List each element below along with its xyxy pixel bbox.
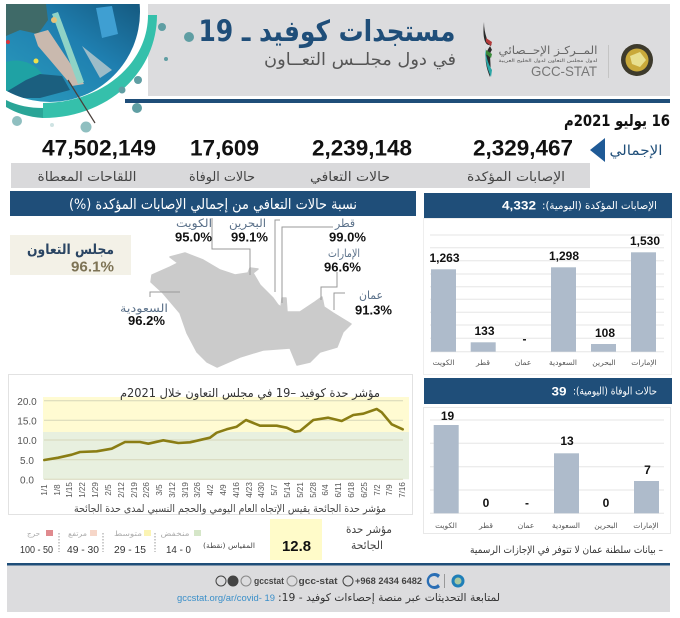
callout: GCC recovery (10, 235, 131, 276)
severity line (44, 409, 403, 460)
arrow (590, 138, 605, 162)
x axis labels: 6/18 (347, 482, 356, 498)
x axis labels: 7/9 (385, 484, 394, 496)
severity label: مؤشر حدة (346, 522, 392, 537)
daily deaths heading (424, 378, 672, 404)
y axis: 15.0 (17, 416, 37, 428)
x axis labels: 4/23 (245, 482, 254, 498)
map labels: البحرين (229, 216, 266, 231)
daily deaths heading: 39 (552, 384, 567, 398)
bar labels: الإمارات (631, 358, 657, 367)
x axis labels: 6/4 (321, 484, 330, 496)
legend: severity scale: 100 - 50 (20, 544, 53, 556)
x axis labels: 4/2 (206, 484, 215, 496)
logo: GCC-STAT: المــركـز الإحــصائي (498, 44, 598, 57)
bar labels: قطر (475, 358, 490, 367)
x axis labels: 2/26 (142, 482, 151, 498)
y axis: 5.0 (20, 456, 34, 467)
totals numbers: 2,329,467 (473, 136, 573, 160)
bar labels: البحرين (592, 358, 616, 367)
map labels: السعودية (120, 302, 168, 315)
map labels: الإمارات (328, 246, 360, 261)
x axis labels: 1/1 (40, 484, 49, 496)
bar values: 1,298 (549, 249, 579, 263)
bar values: 0 (603, 496, 610, 510)
daily deaths heading: حالات الوفاة (اليومية): (573, 386, 657, 398)
bar values: 1,263 (429, 251, 460, 265)
x axis labels: 1/8 (53, 484, 62, 496)
x axis labels: 1/15 (65, 482, 74, 498)
x axis labels: 5/14 (283, 482, 292, 498)
icon: swoosh logo (427, 573, 440, 589)
footnote: – بيانات سلطنة عمان لا تتوفر في الإجازات الرسمية (470, 545, 663, 556)
logo: GCC-STAT: لدول مجلس التعاون لدول الخليج العربية (498, 59, 598, 64)
bar values: 13 (560, 434, 574, 448)
legend: severity scale: 49 - 30 (67, 544, 99, 556)
logo: GCC-STAT (483, 22, 609, 79)
totals numbers (42, 136, 573, 160)
icon: GCC emblem (621, 44, 653, 76)
map labels: 99.1% (231, 230, 268, 244)
bar labels: قطر (478, 521, 493, 530)
bar labels: السعودية (552, 521, 580, 530)
x axis labels: 5/7 (270, 484, 279, 496)
map labels (120, 216, 392, 328)
map labels: 91.3% (355, 302, 392, 318)
title: مستجدات كوفيد ـ 19 (198, 14, 455, 48)
date: 16 يوليو 2021م (564, 111, 670, 130)
totals labels strip: حالات الوفاة (189, 170, 255, 185)
daily cases heading: الإصابات المؤكدة (اليومية): (542, 200, 657, 212)
legend: severity scale: 14 - 0 (166, 544, 191, 556)
map labels: عمان (359, 288, 383, 302)
totals labels strip: اللقاحات المعطاة (38, 170, 136, 185)
y axis: 20.0 (17, 397, 37, 408)
daily cases heading: 4,332 (502, 198, 536, 212)
footer contacts: +968 2434 6482 (355, 576, 422, 587)
bar values: 7 (644, 463, 651, 477)
x axis labels: 5/21 (296, 482, 305, 498)
x axis labels: 1/22 (78, 482, 87, 498)
bar labels (433, 358, 657, 367)
map of GCC (151, 253, 351, 367)
totals labels strip: حالات التعافي (310, 170, 390, 185)
bar labels: الإمارات (633, 521, 659, 530)
icon: round logo (452, 574, 464, 588)
legend: severity scale: متوسط (114, 530, 142, 538)
x axis labels: 3/26 (193, 482, 202, 498)
x axis labels: 2/12 (117, 482, 126, 498)
y axis (17, 397, 37, 486)
map labels: 95.0% (175, 230, 212, 244)
severity label: الجائحة (351, 538, 383, 552)
panel: daily deaths (424, 378, 672, 534)
header banner (125, 4, 670, 103)
severity label (346, 522, 392, 552)
x axis labels: 4/30 (257, 482, 266, 498)
y axis: 0.0 (20, 476, 34, 486)
x axis labels (40, 482, 407, 498)
panel: daily confirmed cases (424, 193, 672, 374)
legend: severity scale (20, 530, 255, 556)
panel: severity index chart (8, 374, 412, 515)
decorative droplets (12, 23, 194, 132)
totals numbers: 2,239,148 (312, 136, 412, 160)
subtitle: في دول مجلــس التعــاون (264, 50, 456, 70)
footer band (7, 563, 670, 612)
map leader lines (150, 218, 345, 310)
x axis labels: 2/19 (130, 482, 139, 498)
icon: needle (68, 80, 95, 123)
x axis labels: 3/19 (181, 482, 190, 498)
x axis labels: 7/16 (398, 482, 407, 498)
x axis labels: 2/5 (104, 484, 113, 496)
footer contacts (216, 573, 464, 589)
bar values: 133 (474, 324, 495, 338)
bars (434, 425, 659, 513)
x axis labels: 5/28 (309, 482, 318, 498)
totals labels strip (11, 163, 590, 188)
panel: recovery rate heading (10, 191, 416, 216)
totals labels strip: الإصابات المؤكدة (467, 170, 565, 185)
map labels: 96.2% (128, 313, 165, 328)
footer link line: gccstat.org/ar/covid- 19 (177, 593, 275, 603)
y axis: 10.0 (17, 436, 37, 447)
footer contacts: gccstat (254, 576, 284, 586)
footer link line: لمتابعة التحديثات عبر منصة إحصاءات كوفيد - 19: (278, 592, 500, 604)
panel: recovery rate heading: نسبة حالات التعافي من إجمالي الإصابات المؤكدة (%) (69, 197, 357, 213)
daily cases heading (424, 193, 672, 218)
bar values: 1,530 (630, 234, 660, 248)
bar values (441, 409, 651, 510)
legend: severity scale: 29 - 15 (114, 544, 146, 556)
callout: GCC recovery: مجلس التعاون (27, 242, 114, 258)
bar values: 108 (595, 326, 615, 340)
header image: medical collage (6, 4, 157, 118)
severity value box: 12.8 (282, 538, 311, 555)
map labels: 99.0% (329, 230, 366, 244)
map labels: 96.6% (324, 260, 361, 274)
totals numbers: 17,609 (190, 136, 259, 160)
map labels: قطر (334, 216, 355, 231)
icon: social media (216, 576, 353, 586)
legend: severity scale: مرتفع (68, 530, 87, 538)
chart title: مؤشر حدة كوفيد –19 في مجلس التعاون خلال 2021م (120, 386, 380, 401)
callout: GCC recovery: 96.1% (71, 258, 114, 276)
bar labels: الكويت (433, 358, 454, 367)
bar values: 0 (483, 496, 490, 510)
x axis labels: 4/16 (232, 482, 241, 498)
chart note: مؤشر حدة الجائحة يقيس الإتجاه العام اليومي والحجم النسبي لمدى حدة الجائحة (74, 503, 386, 515)
bar values: - (522, 332, 526, 346)
totals numbers: 47,502,149 (42, 136, 156, 160)
x axis labels: 3/5 (155, 484, 164, 496)
bar labels: البحرين (594, 521, 618, 530)
grid (44, 401, 403, 479)
x axis labels: 6/11 (334, 482, 343, 497)
total label: الإجمالي (610, 143, 662, 159)
footer link line (177, 592, 500, 604)
x axis labels: 7/2 (373, 484, 382, 496)
legend: severity scale: حرج (27, 530, 40, 538)
bar values: - (525, 496, 529, 510)
legend: severity scale: المقياس (نقطة) (203, 542, 255, 550)
bar values (429, 234, 660, 346)
x axis labels: 1/29 (91, 482, 100, 498)
x axis labels: 3/12 (168, 482, 177, 498)
bar labels: عمان (518, 521, 534, 530)
bar labels: السعودية (549, 358, 577, 367)
severity value box (270, 519, 322, 560)
chart zones (43, 397, 409, 479)
legend: severity scale: منخفض (160, 530, 190, 538)
x axis labels: 4/9 (219, 484, 228, 496)
x axis labels: 6/25 (360, 482, 369, 498)
logo: GCC-STAT: GCC-STAT (531, 63, 597, 79)
bar labels: الكويت (435, 521, 457, 530)
bar labels (435, 521, 659, 530)
map labels: الكويت (176, 216, 212, 231)
footer contacts: gcc-stat (298, 576, 338, 586)
bar values: 19 (441, 409, 454, 423)
bars (431, 252, 656, 352)
bar labels: عمان (515, 358, 531, 367)
